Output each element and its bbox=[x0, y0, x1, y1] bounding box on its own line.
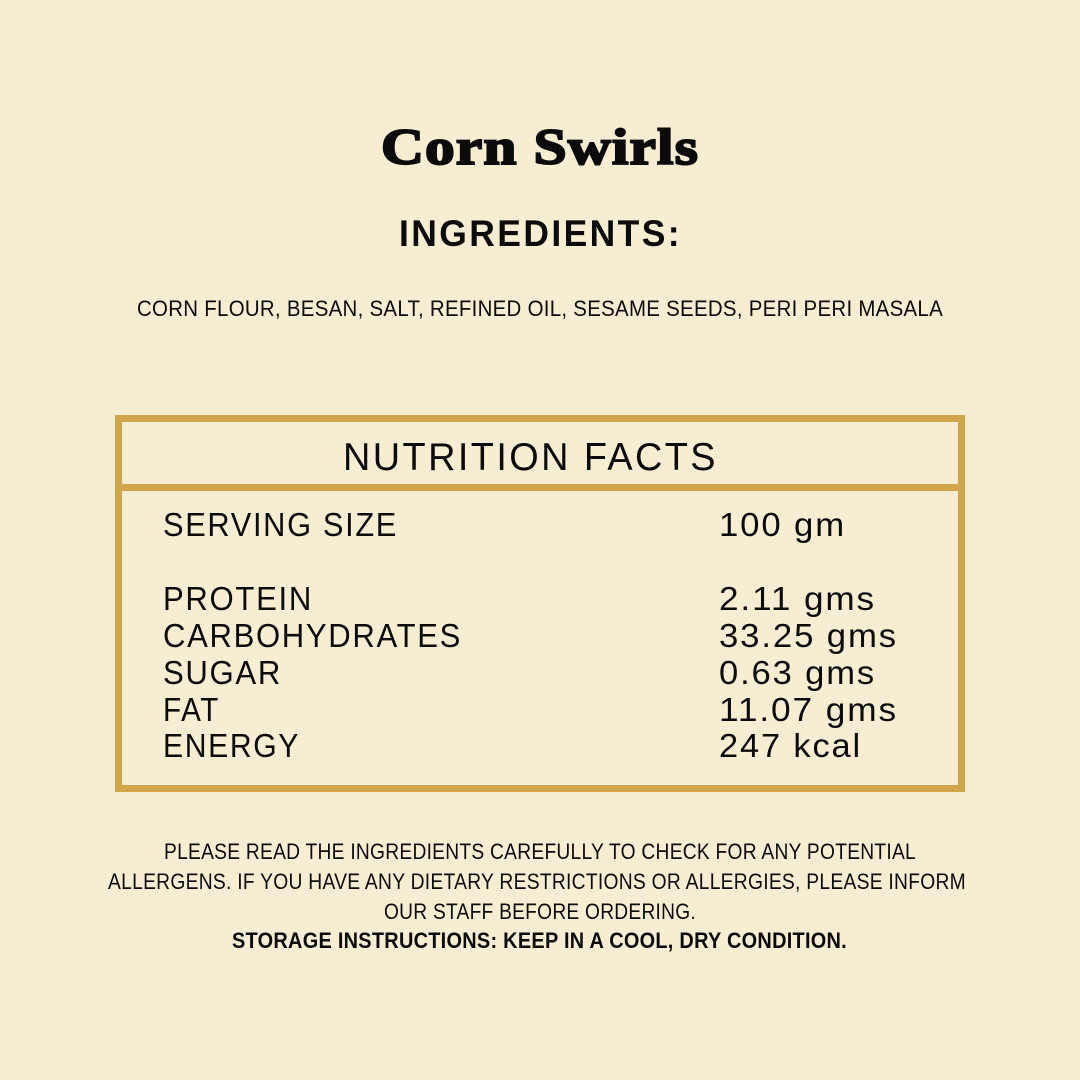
table frame bbox=[118, 418, 962, 788]
row: carbohydrates bbox=[163, 618, 898, 655]
panel: nutrition facts bbox=[115, 418, 965, 788]
row: carbohydrates: CARBOHYDRATES bbox=[163, 618, 462, 655]
ingredients list: CORN FLOUR, BESAN, SALT, REFINED OIL, SESAME SEEDS, PERI PERI MASALA bbox=[137, 296, 943, 321]
row: sugar bbox=[163, 655, 876, 692]
row: protein bbox=[163, 581, 876, 618]
allergen notice: PLEASE READ THE INGREDIENTS CAREFULLY TO CHECK FOR ANY POTENTIAL bbox=[164, 839, 916, 864]
row: serving size: SERVING SIZE bbox=[163, 507, 398, 544]
row: fat: FAT bbox=[163, 692, 220, 729]
row: protein: PROTEIN bbox=[163, 581, 313, 618]
allergen notice: ALLERGENS. IF YOU HAVE ANY DIETARY RESTRICTIONS OR ALLERGIES, PLEASE INFORM bbox=[108, 869, 966, 894]
header divider bbox=[115, 484, 965, 491]
row: energy: ENERGY bbox=[163, 728, 300, 765]
row: sugar: 0.63 gms bbox=[719, 655, 876, 692]
row: carbohydrates: 33.25 gms bbox=[719, 618, 898, 655]
table heading: NUTRITION FACTS bbox=[343, 436, 718, 479]
allergen notice: OUR STAFF BEFORE ORDERING. bbox=[384, 899, 696, 924]
row: protein: 2.11 gms bbox=[719, 581, 876, 618]
row: serving size: 100 gm bbox=[719, 507, 846, 544]
storage instructions: STORAGE INSTRUCTIONS: KEEP IN A COOL, DRY CONDITION. bbox=[232, 928, 847, 953]
row: sugar: SUGAR bbox=[163, 655, 282, 692]
row: energy bbox=[163, 728, 862, 765]
row: serving size bbox=[163, 507, 846, 544]
row: energy: 247 kcal bbox=[719, 728, 862, 765]
title: Corn Swirls bbox=[381, 120, 699, 176]
row: fat: 11.07 gms bbox=[719, 692, 898, 729]
heading: ingredients: INGREDIENTS: bbox=[399, 213, 682, 254]
row: fat bbox=[163, 692, 898, 729]
allergen notice bbox=[108, 839, 966, 924]
